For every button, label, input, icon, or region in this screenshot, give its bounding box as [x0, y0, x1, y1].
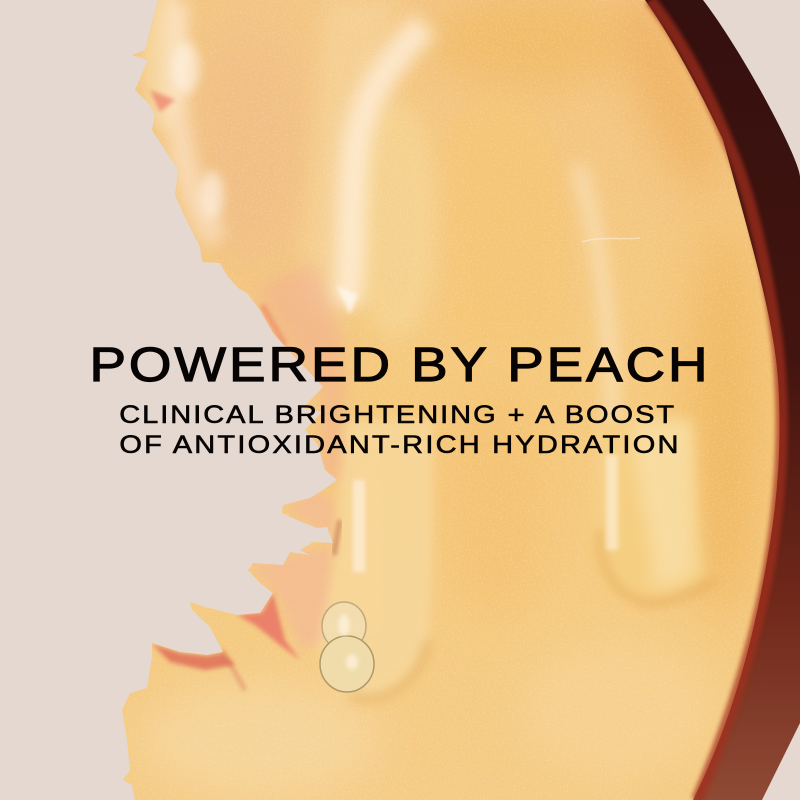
pale flesh band	[303, 0, 394, 318]
large gel highlight stripe	[347, 25, 425, 305]
heading: POWERED BY PEACH	[89, 339, 711, 392]
centre of flesh, inner drip	[452, 112, 556, 326]
pink blush along the torn edge	[255, 262, 345, 480]
droplets	[320, 602, 374, 692]
left gel drip	[319, 420, 433, 698]
thin stripe on right drip	[578, 165, 612, 550]
right drip body	[595, 420, 705, 600]
left edge white gel highlights	[174, 0, 218, 240]
lower flesh pale area	[140, 680, 380, 800]
subheading: OF ANTIOXIDANT-RICH HYDRATION	[119, 431, 681, 459]
red inner skin rim	[650, 0, 782, 800]
peach skin	[645, 0, 800, 800]
upper left pale flesh lobe	[230, 203, 274, 230]
orange shading near top	[430, 0, 630, 90]
red torn edge marks	[152, 644, 235, 670]
subheading	[119, 401, 681, 459]
subheading: CLINICAL BRIGHTENING + A BOOST	[119, 401, 676, 429]
